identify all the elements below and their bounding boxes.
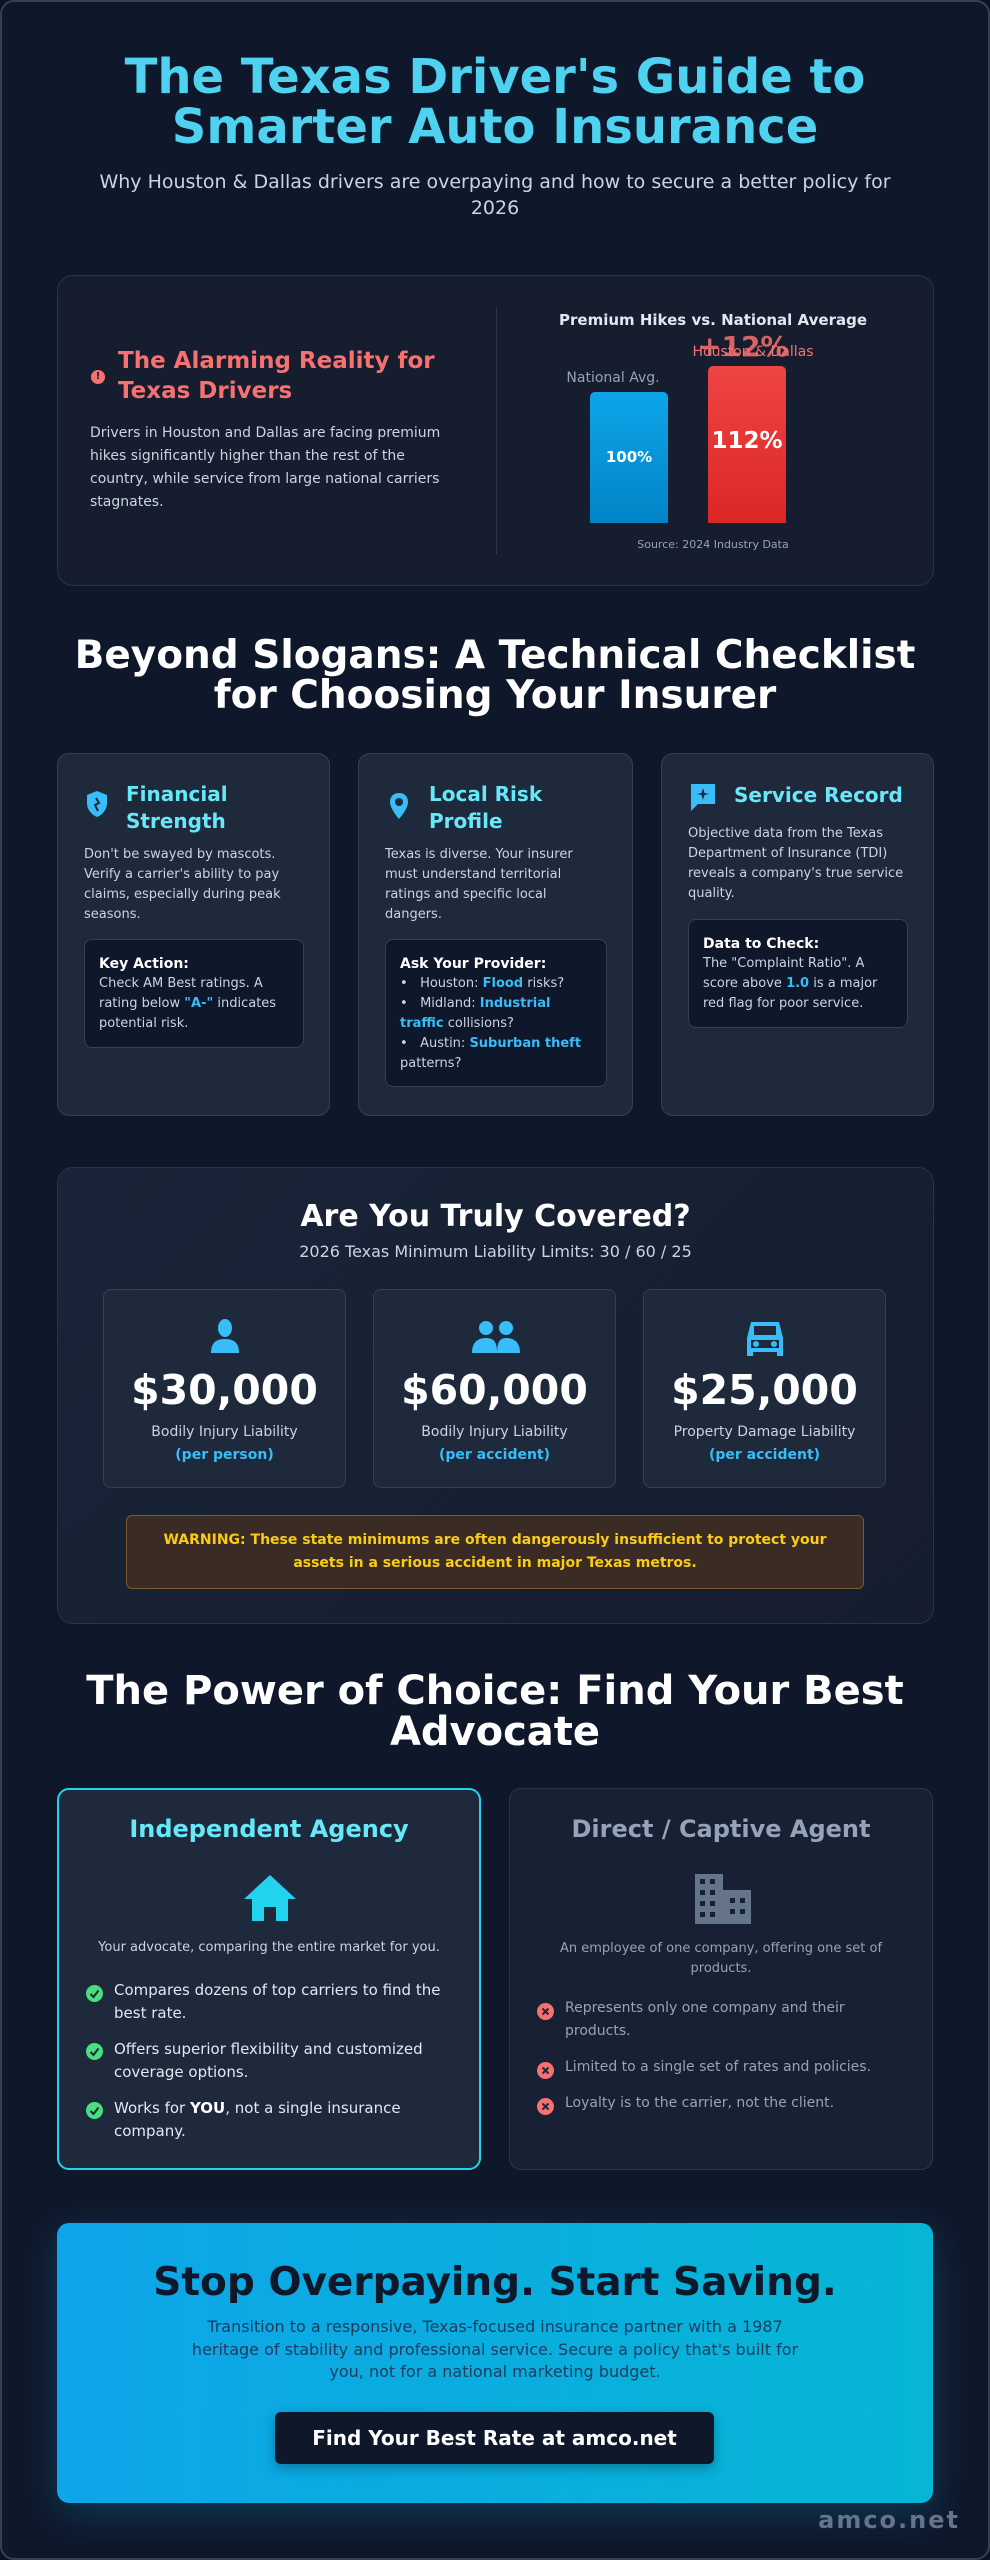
title: The Texas Driver's Guide to: [125, 49, 865, 105]
button: [275, 2412, 714, 2464]
list: cons: Loyalty is to the carrier, not the client.: [565, 2095, 834, 2111]
heading: Strength: [126, 809, 226, 833]
panel: independent agency: [57, 1788, 481, 2170]
heading: power of choice: [86, 1668, 904, 1755]
box: key action: Key Action:: [99, 956, 189, 972]
stat: 30000: [103, 1289, 346, 1488]
panel: financial strength: [57, 753, 330, 1116]
icon: alert: !: [96, 371, 100, 382]
list: pros: Works for YOU, not a single insurance company.: [114, 2099, 401, 2140]
icon: chat sparkle: [691, 784, 715, 811]
list: pros: [86, 1981, 440, 2140]
box: key action: Check AM Best ratings. A rating below "A-" indicates potential risk.: [99, 976, 276, 1031]
stat: 60000: (per accident): [439, 1447, 550, 1463]
stat: 25000: $25,000: [671, 1366, 858, 1414]
list: pros: Compares dozens of top carriers to find the best rate.: [114, 1981, 440, 2022]
box: ask provider: • Houston: Flood risks?: [400, 976, 564, 991]
text: cta body: Transition to a responsive, Texas-focused insurance partner with a 1987 heritage of stability and professional service. Secure a policy that's built for you, not for a national marketing budget.: [192, 2317, 798, 2381]
box: data to check: The "Complaint Ratio". A score above 1.0 is a major red flag for poor service.: [703, 956, 877, 1011]
stat: 25000: Property Damage Liability: [674, 1424, 855, 1440]
icon: shield: [87, 791, 107, 817]
subtitle: Why Houston & Dallas drivers are overpaying and how to secure a better policy for 2026: [99, 171, 891, 219]
stat: 30000: Bodily Injury Liability: [151, 1424, 298, 1440]
stat: 60000: [373, 1289, 616, 1488]
bar: houston: [708, 366, 786, 523]
icon: car: [747, 1322, 783, 1356]
heading: cta: Stop Overpaying. Start Saving.: [153, 2260, 837, 2305]
heading: [429, 782, 542, 833]
box: ask provider: • Midland: Industrial traffic collisions?: [400, 996, 550, 1031]
heading: [126, 782, 228, 833]
heading: checklist: Beyond Slogans: A Technical Checklist: [75, 633, 915, 678]
box: ask provider: Ask Your Provider:: [400, 956, 546, 972]
subtitle: limits: 2026 Texas Minimum Liability Limits: 30 / 60 / 25: [299, 1242, 692, 1261]
heading: alarming reality: The Alarming Reality for Texas Drivers: [118, 348, 435, 404]
chart title: Premium Hikes vs. National Average: [559, 311, 867, 329]
label: houston dallas: Houston & Dallas: [692, 344, 814, 360]
footer: brand: amco.net: [818, 2506, 960, 2534]
button: Find Your Best Rate at amco.net: [312, 2426, 677, 2450]
box: ask provider: • Austin: Suburban theft patterns?: [400, 1036, 581, 1071]
panel: captive agent: [509, 1788, 933, 2170]
heading: checklist: [75, 633, 915, 718]
panel: coverage: [57, 1167, 934, 1624]
panel: alarming reality: [57, 275, 934, 586]
icon: people: [472, 1321, 520, 1353]
heading: checklist: for Choosing Your Insurer: [214, 673, 776, 718]
text: An employee of one company, offering one set of products.: [560, 1941, 882, 1976]
callout: warning: WARNING: These state minimums are often dangerously insufficient to protect your assets in a serious accident in major Texas metros.: [163, 1532, 827, 1571]
list: cons: Limited to a single set of rates and policies.: [565, 2059, 871, 2075]
bar: houston: 112%: [711, 428, 783, 454]
icon: pin: [390, 793, 408, 819]
stat: 60000: $60,000: [401, 1366, 588, 1414]
box: ask provider: [385, 939, 607, 1087]
panel: local risk: [358, 753, 633, 1116]
callout: warning: [126, 1515, 864, 1589]
list: pros: Offers superior flexibility and customized coverage options.: [114, 2040, 423, 2081]
heading: power of choice: The Power of Choice: Find Your Best: [86, 1668, 904, 1714]
heading: Service Record: [734, 783, 903, 807]
source: Source: 2024 Industry Data: [637, 538, 789, 551]
heading: Local Risk: [429, 782, 542, 806]
panel: service record: [661, 753, 934, 1116]
list: cons: [537, 2000, 871, 2115]
stat: 60000: Bodily Injury Liability: [421, 1424, 568, 1440]
title: [124, 49, 865, 155]
text: alarming body: Drivers in Houston and Dallas are facing premium hikes significantly higher than the rest of the country, while service from large national carriers stagnates.: [90, 425, 440, 510]
icon: house: [244, 1875, 296, 1921]
icon: alert: [91, 370, 105, 384]
heading: Financial: [126, 782, 228, 806]
box: data to check: [688, 919, 908, 1028]
icon: building: [695, 1874, 751, 1924]
text: Your advocate, comparing the entire market for you.: [98, 1940, 440, 1955]
box: key action: [84, 939, 304, 1048]
stat: 30000: (per person): [175, 1447, 274, 1463]
heading: power of choice: Advocate: [390, 1709, 600, 1755]
panel: cta: [57, 2223, 933, 2503]
icon: person: [211, 1319, 239, 1353]
text: Don't be swayed by mascots. Verify a carrier's ability to pay claims, especially during peak seasons.: [84, 847, 281, 922]
chart: premium hikes: [559, 311, 867, 551]
bar: national: 100%: [606, 448, 652, 466]
heading: covered: Are You Truly Covered?: [300, 1199, 691, 1234]
heading: Direct / Captive Agent: [572, 1815, 870, 1843]
heading: Independent Agency: [129, 1815, 409, 1843]
stat: 25000: [643, 1289, 886, 1488]
box: data to check: Data to Check:: [703, 936, 819, 952]
stat: 25000: (per accident): [709, 1447, 820, 1463]
text: Objective data from the Texas Department of Insurance (TDI) reveals a company's true service quality.: [688, 826, 903, 901]
label: +12%: +12%: [698, 330, 788, 363]
text: Texas is diverse. Your insurer must understand territorial ratings and specific local dangers.: [385, 847, 573, 922]
stat: 30000: $30,000: [131, 1366, 318, 1414]
bar: national: [590, 392, 668, 523]
label: national avg: National Avg.: [566, 370, 660, 386]
heading: Profile: [429, 809, 503, 833]
list: cons: Represents only one company and their products.: [565, 2000, 845, 2039]
title: Smarter Auto Insurance: [172, 99, 818, 155]
